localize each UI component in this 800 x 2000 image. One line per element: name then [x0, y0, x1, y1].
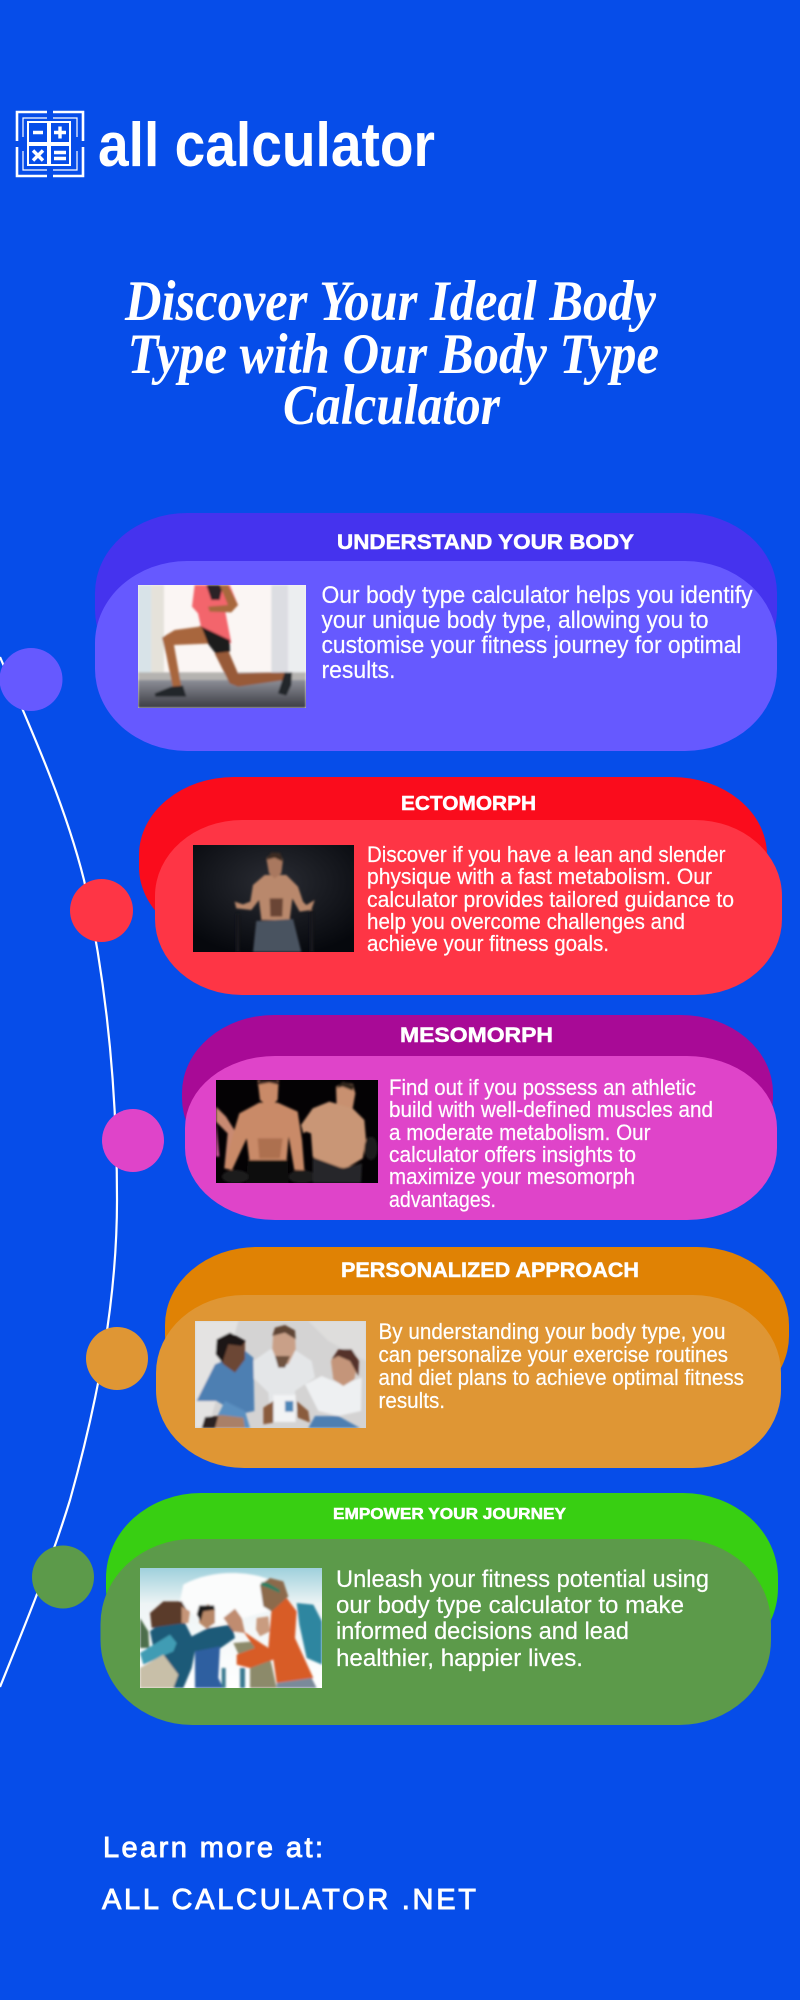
marker: understand your body: [0, 648, 62, 711]
body text: mesomorph: Find out if you possess an athletic: [389, 1075, 696, 1100]
heading: mesomorph: MESOMORPH: [400, 1024, 553, 1047]
logo: [17, 111, 435, 180]
title: [124, 270, 659, 437]
footer: learn more: ALL CALCULATOR .NET: [102, 1884, 476, 1916]
body text: ectomorph: help you overcome challenges and: [367, 909, 685, 934]
photo: medical team with a tablet: [195, 1321, 366, 1428]
panel: personalized approach: [156, 1247, 789, 1468]
heading: ectomorph: ECTOMORPH: [401, 793, 536, 815]
body text: mesomorph: calculator offers insights to: [389, 1142, 636, 1167]
body text: personalized approach: [378, 1319, 744, 1413]
body text: ectomorph: Discover if you have a lean and slender: [367, 842, 726, 867]
marker: personalized approach: [86, 1327, 148, 1390]
body text: mesomorph: [389, 1075, 713, 1212]
body text: mesomorph: maximize your mesomorph: [389, 1164, 635, 1189]
panel: ectomorph: [139, 777, 782, 995]
body text: ectomorph: achieve your fitness goals.: [367, 931, 609, 956]
heading: empower your journey: EMPOWER YOUR JOURNEY: [333, 1506, 566, 1523]
marker: empower your journey: [32, 1546, 94, 1608]
body text: ectomorph: [367, 842, 734, 956]
timeline curve: [0, 657, 117, 1687]
title: Type with Our Body Type: [128, 323, 659, 386]
footer: learn more: [102, 1832, 476, 1916]
body text: empower your journey: [336, 1566, 709, 1672]
logo wordmark: all calculator: [98, 111, 435, 180]
body text: understand your body: [322, 582, 752, 684]
heading: understand your body: UNDERSTAND YOUR BODY: [337, 531, 634, 554]
body text: mesomorph: build with well-defined muscles and: [389, 1097, 713, 1122]
body text: empower your journey: informed decisions and lead: [336, 1618, 629, 1645]
photo: muscular man with resistance bands: [193, 845, 354, 952]
body text: understand your body: customise your fitness journey for optimal: [322, 632, 742, 659]
body text: understand your body: Our body type calculator helps you identify: [322, 582, 752, 609]
body text: understand your body: results.: [322, 657, 396, 684]
panel: empower your journey: [100, 1493, 778, 1725]
photo: two men with dumbbells: [216, 1080, 378, 1183]
marker: mesomorph: [102, 1109, 164, 1172]
marker: ectomorph: [70, 879, 133, 942]
body text: personalized approach: results.: [378, 1388, 445, 1413]
body text: personalized approach: By understanding your body type, you: [378, 1319, 726, 1344]
footer: learn more: Learn more at:: [103, 1832, 323, 1864]
heading: personalized approach: PERSONALIZED APPROACH: [341, 1259, 639, 1282]
body text: mesomorph: a moderate metabolism. Our: [389, 1120, 651, 1145]
body text: empower your journey: Unleash your fitness potential using: [336, 1566, 709, 1593]
icon: calculator: [17, 112, 83, 176]
title: Calculator: [283, 374, 501, 437]
panel: mesomorph: [182, 1015, 777, 1220]
body text: personalized approach: can personalize your exercise routines: [378, 1342, 728, 1367]
body text: understand your body: your unique body type, allowing you to: [322, 607, 708, 634]
photo: woman doing a lunge: [138, 585, 306, 708]
body text: empower your journey: healthier, happier lives.: [336, 1645, 583, 1672]
body text: empower your journey: our body type calculator to make: [336, 1592, 684, 1619]
body text: mesomorph: advantages.: [389, 1187, 496, 1212]
photo: hikers giving a high five: [140, 1568, 322, 1688]
body text: ectomorph: calculator provides tailored guidance to: [367, 887, 734, 912]
body text: personalized approach: and diet plans to achieve optimal fitness: [378, 1365, 744, 1390]
body text: ectomorph: physique with a fast metabolism. Our: [367, 864, 712, 889]
title: Discover Your Ideal Body: [124, 270, 657, 333]
panel: understand your body: [95, 513, 777, 751]
